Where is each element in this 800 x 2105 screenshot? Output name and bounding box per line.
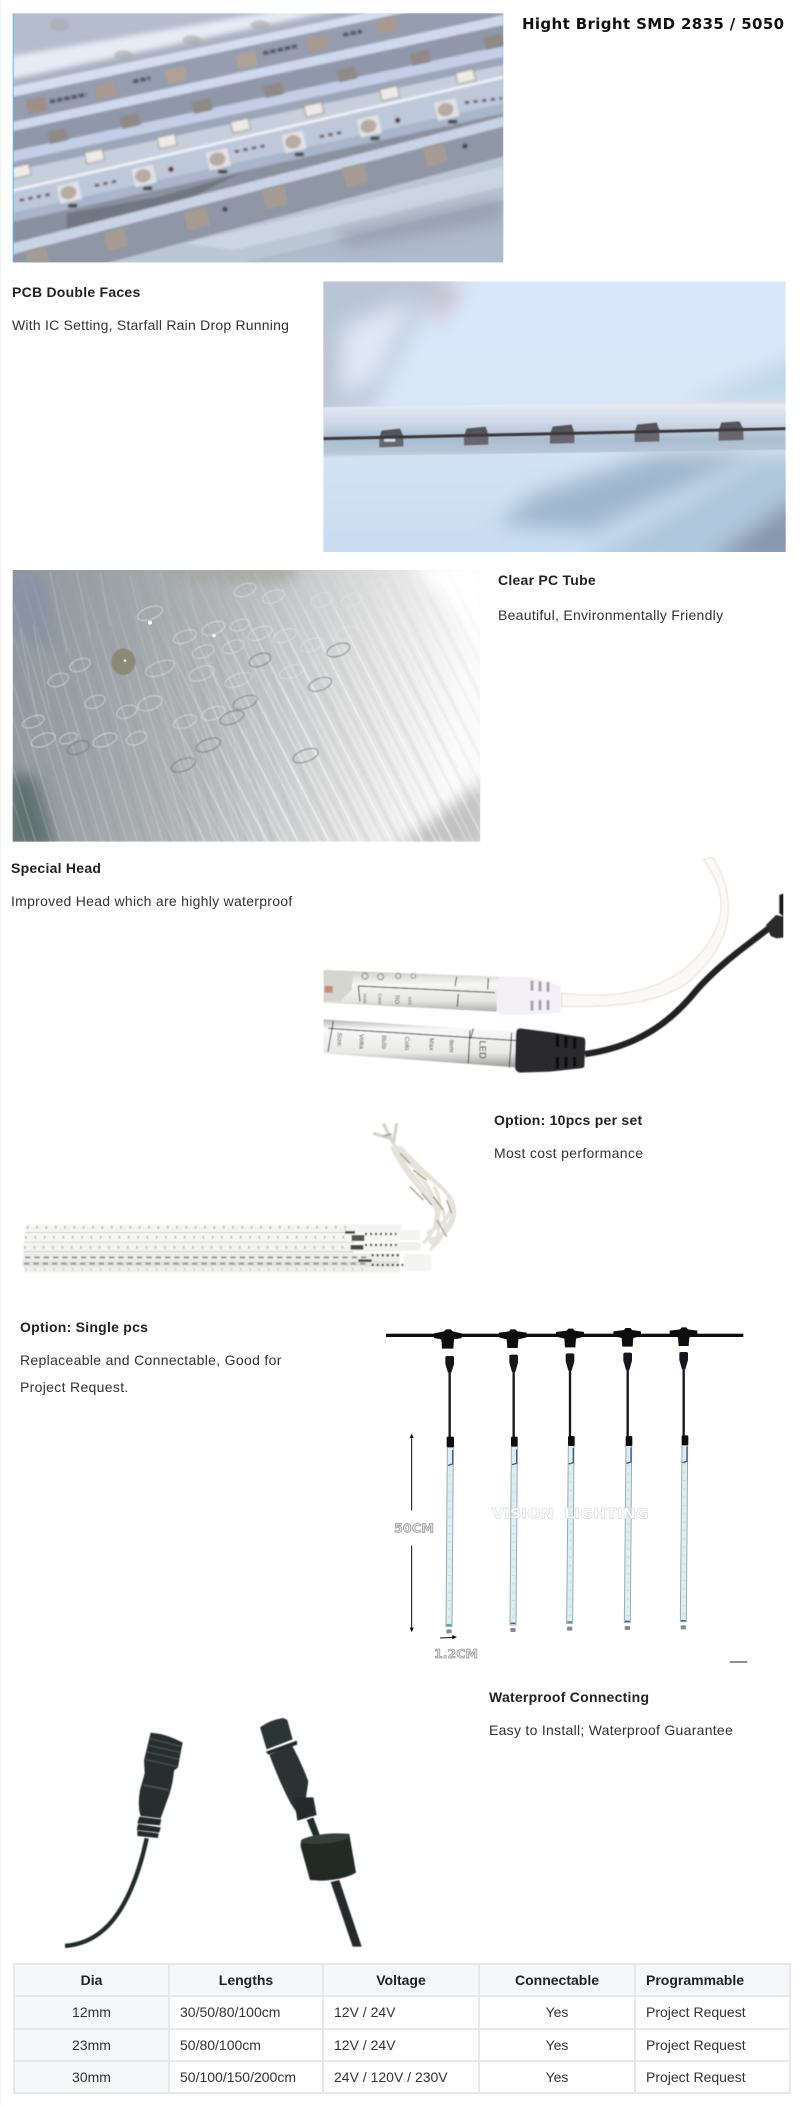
LED row 3	[11, 69, 476, 179]
table: tube specifications: 24V / 120V / 230V	[334, 2069, 448, 2085]
cup	[301, 1834, 356, 1881]
table: tube specifications: 12mm	[72, 2004, 111, 2020]
photo: tube heads with white and black waterproof connectors: Max	[427, 1038, 434, 1051]
photo: tube heads with white and black waterproof connectors	[323, 856, 784, 1074]
photo: tube heads with white and black waterproof connectors: Colo	[403, 1037, 410, 1051]
LED row 5	[25, 143, 467, 268]
tubes	[23, 1224, 432, 1273]
text: Most cost performance: Most cost performance	[494, 1145, 643, 1161]
dimension label: 1.2CM: 1.2CM	[434, 1647, 478, 1661]
table: tube specifications: 30/50/80/100cm	[180, 2004, 280, 2020]
title: Hight Bright SMD 2835 / 5050: Hight Bright SMD 2835 / 5050	[522, 15, 784, 33]
photo: LED strips with SMD chips	[12, 13, 504, 262]
LED row 4 main strip	[20, 98, 502, 207]
table: tube specifications: Project Request	[646, 2069, 746, 2085]
table: tube specifications: Project Request	[646, 2004, 746, 2020]
photo: tube heads with white and black waterproof connectors: 120	[407, 997, 412, 1005]
heading: Clear PC Tube: Clear PC Tube	[498, 572, 596, 588]
photo: tube heads with white and black waterproof connectors: Color	[377, 993, 382, 1005]
LED row 1	[25, 16, 398, 114]
table: tube specifications: Project Request	[646, 2037, 746, 2053]
upper tube	[323, 970, 500, 1012]
pendant plugs and cables	[445, 1352, 688, 1373]
black connector	[515, 1028, 585, 1073]
text: Replaceable and Connectable: Project Request.	[20, 1378, 129, 1394]
text: Replaceable and Connectable: Replaceable and Connectable, Good for	[20, 1352, 282, 1368]
left connector	[65, 1838, 147, 1946]
heading: Option: 10pcs per set: Option: 10pcs per set	[494, 1112, 642, 1128]
table: tube specifications: 23mm	[72, 2037, 111, 2053]
table: tube specifications: Yes	[546, 2069, 568, 2085]
heading: Option: Single pcs: Option: Single pcs	[20, 1319, 148, 1335]
table: tube specifications: Yes	[546, 2037, 568, 2053]
photo: tube heads with white and black waterproof connectors: LED	[477, 1041, 487, 1059]
dimension label: 50CM: 50CM	[394, 1522, 434, 1536]
photo: tube heads with white and black waterproof connectors: Item	[447, 1039, 454, 1053]
T connectors	[434, 1327, 697, 1349]
table: tube specifications: 30mm	[72, 2069, 111, 2085]
photo: tube heads with white and black waterproof connectors: Bulb	[380, 1035, 387, 1049]
heading: PCB Double Faces: PCB Double Faces	[12, 284, 140, 300]
table: tube specifications	[13, 1963, 791, 2094]
table: tube specifications: 12V / 24V	[334, 2037, 396, 2053]
table: tube specifications: Yes	[546, 2004, 568, 2020]
text: Easy to Install: Easy to Install; Waterproof Guarantee	[489, 1722, 733, 1738]
photo: PCB inside clear tube, soft blue background	[323, 281, 786, 552]
table: tube specifications: 50/100/150/200cm	[180, 2069, 296, 2085]
black cable	[585, 927, 770, 1054]
table: tube specifications: Dia	[81, 1972, 102, 1988]
table: tube specifications: Voltage	[376, 1972, 426, 1988]
wire bundle	[373, 1123, 454, 1250]
tube bodies	[446, 1444, 688, 1627]
LED dots and labels	[449, 1463, 685, 1620]
table: tube specifications: Connectable	[515, 1972, 599, 1988]
table: tube specifications: Lengths	[219, 1972, 273, 1988]
photo: waterproof connector pair	[64, 1717, 362, 1949]
heading: Waterproof Connecting: Waterproof Connecting	[489, 1689, 649, 1705]
text: Improved Head: Improved Head which are highly waterproof	[11, 893, 293, 909]
lower tube	[323, 1019, 517, 1067]
table: tube specifications: 12V / 24V	[334, 2004, 396, 2020]
photo: tube heads with white and black waterproof connectors: Size:	[335, 1033, 342, 1048]
photo: tube heads with white and black waterproof connectors: RO	[393, 995, 399, 1004]
photo: clear PC tubes	[12, 570, 480, 842]
photo: tube heads with white and black waterproof connectors: code	[362, 993, 367, 1004]
photo: tube heads with white and black waterproof connectors: Volta	[357, 1034, 364, 1049]
heading: Special Head: Special Head	[11, 860, 101, 876]
table: tube specifications: Programmable	[646, 1972, 744, 1988]
text: With IC Setting: With IC Setting, Starfall Rain Drop Running	[12, 317, 289, 333]
right connector	[260, 1718, 293, 1749]
dimension arrows	[410, 1436, 413, 1629]
text: Replaceable and Connectable	[20, 1352, 282, 1395]
LED row 2	[47, 34, 504, 144]
table: tube specifications: 50/80/100cm	[180, 2037, 261, 2053]
text: Beautiful, Environmentally Friendly: Beautiful, Environmentally Friendly	[498, 607, 723, 623]
watermark: VISION LIGHTING: VISION LIGHTING	[492, 1507, 649, 1523]
diagram: five pendant tubes on T-connector bus with dimensions	[386, 1327, 748, 1663]
bus cable	[386, 1334, 743, 1337]
white connector	[497, 976, 561, 1015]
white cable	[562, 857, 728, 1007]
photo: 10pcs bundle of tubes	[22, 1122, 456, 1272]
